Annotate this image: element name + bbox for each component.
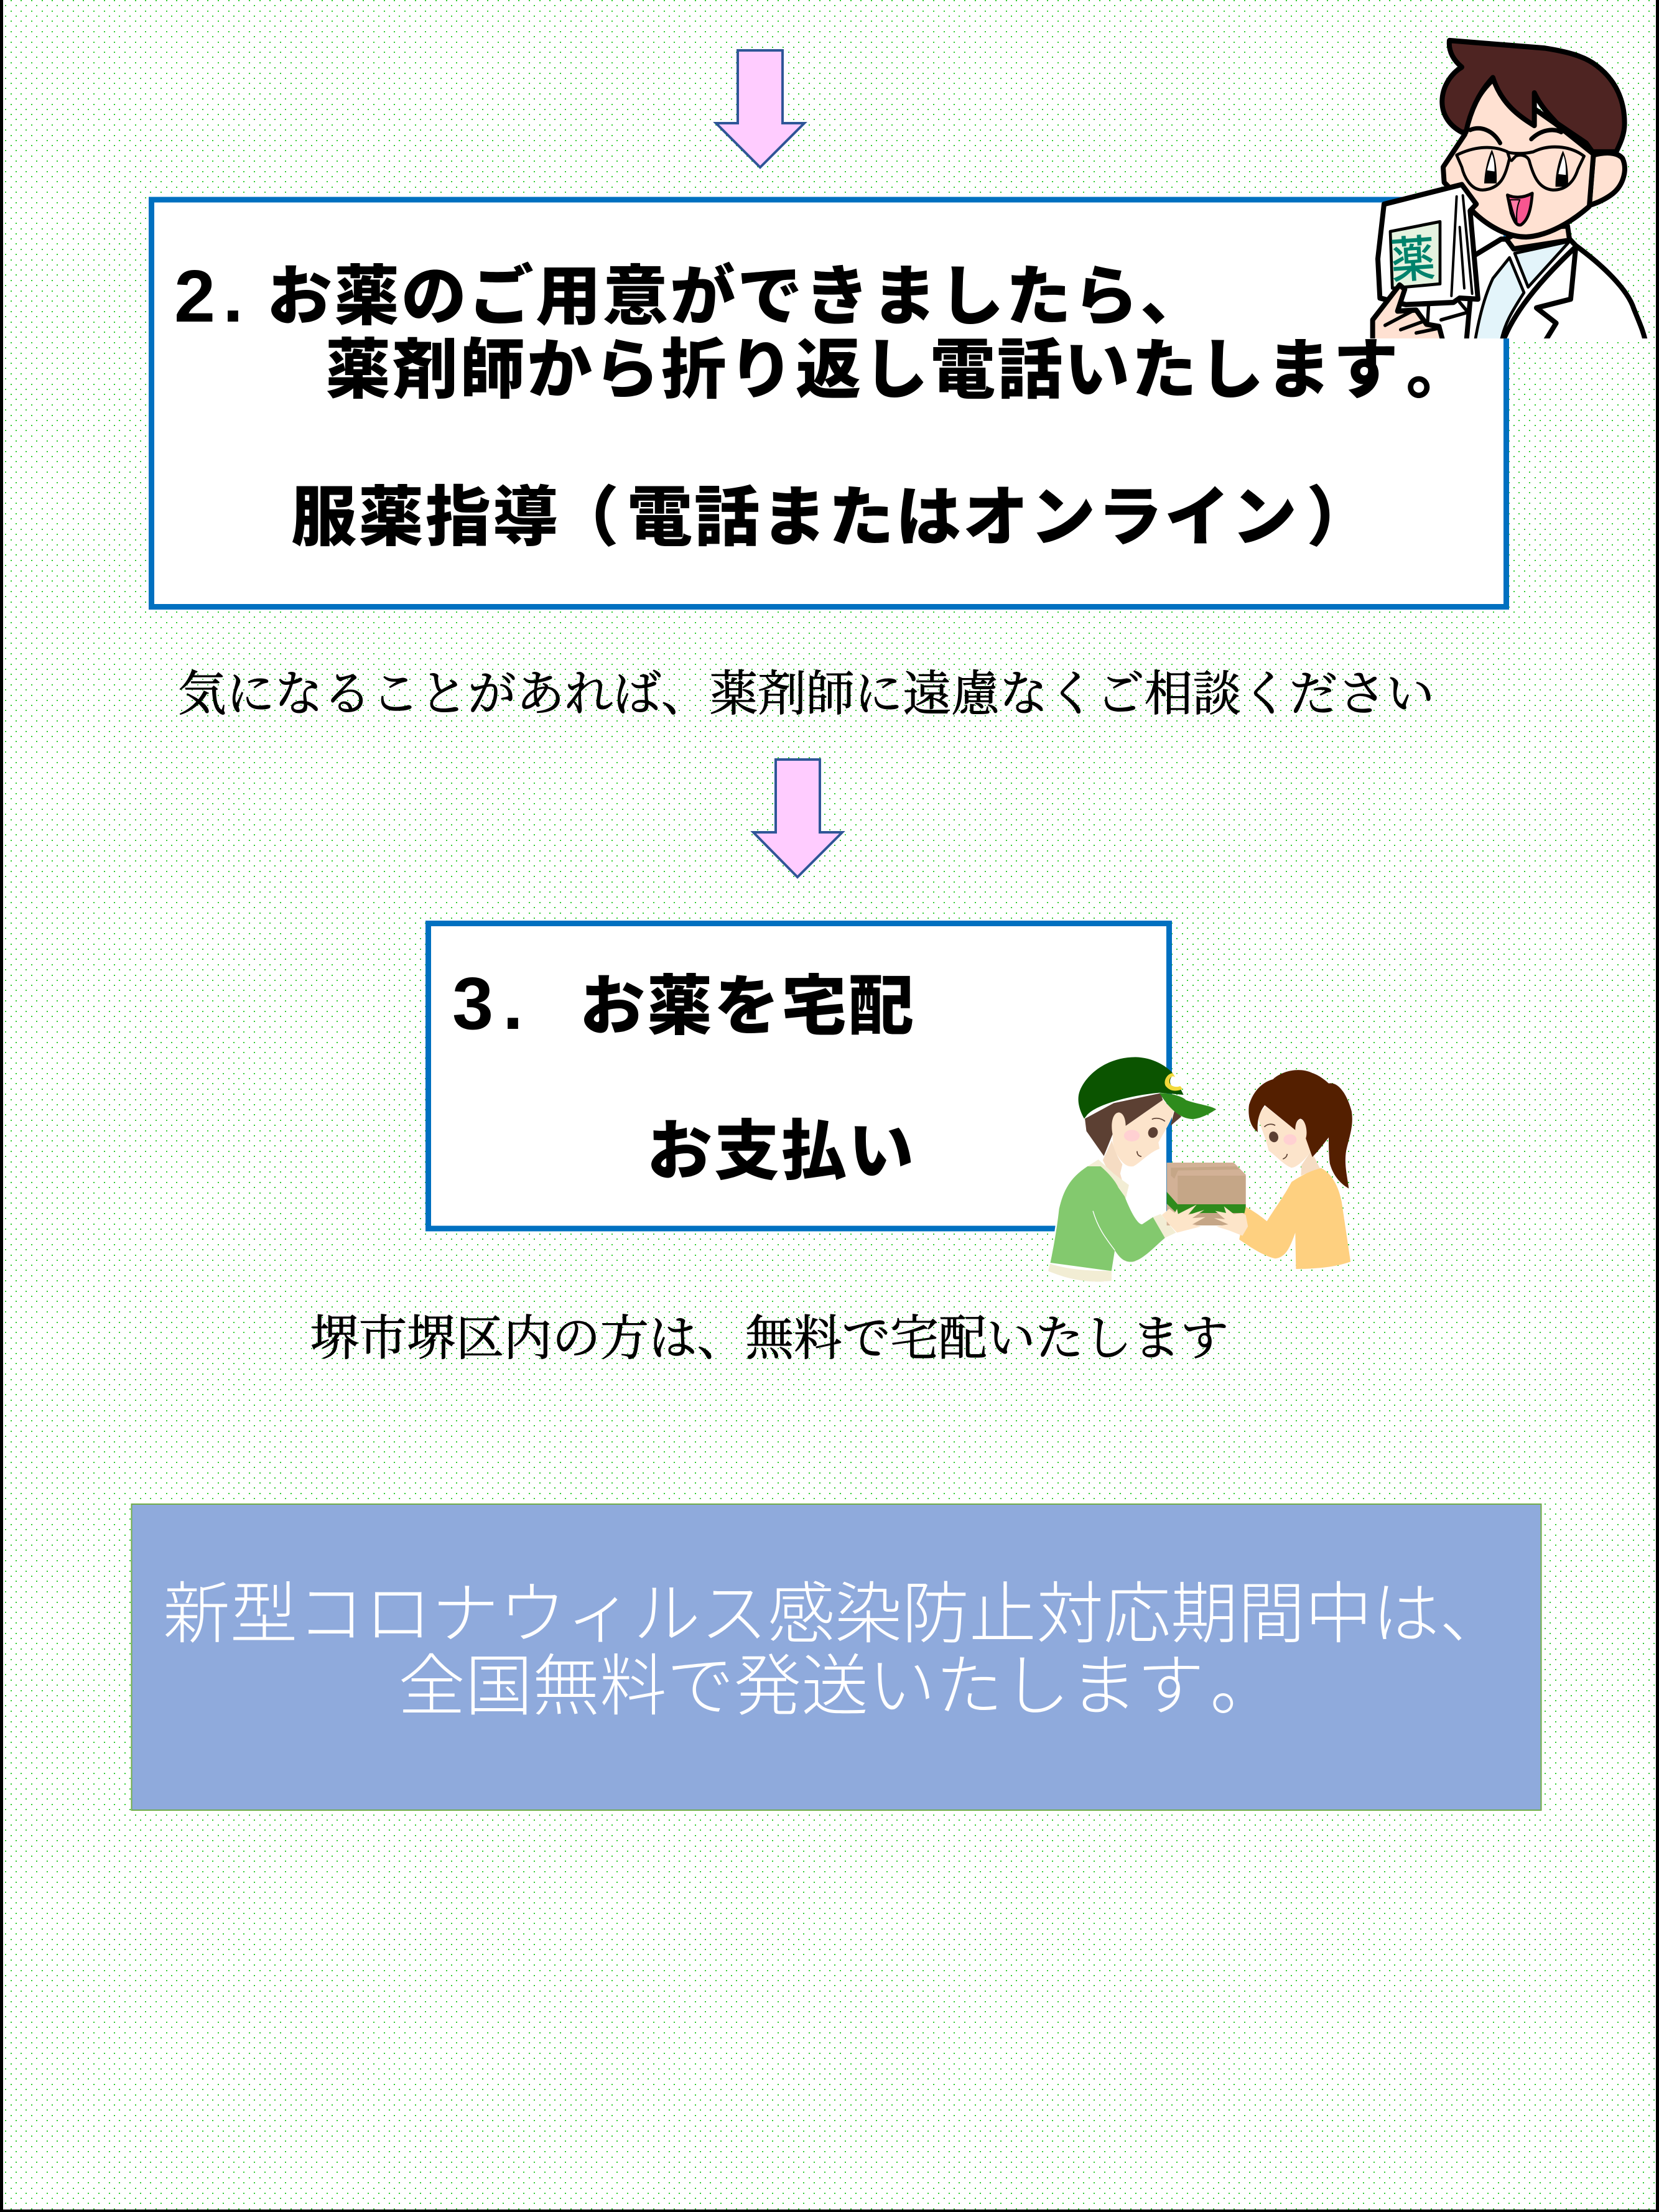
icon label: medicine character: 薬 (1389, 231, 1437, 289)
heading: step 2 third line: 服薬指導（電話またはオンライン） (291, 481, 1373, 554)
panel: step 2 box (152, 200, 1507, 607)
heading: step 2 first line: 2 (174, 255, 217, 338)
arrow: top down arrow (716, 50, 804, 167)
heading: step 2 first line: . (223, 255, 245, 338)
text: notice second line: 全国無料で発送いたします。 (398, 1648, 1277, 1724)
heading: step 3 delivery: 3 (452, 962, 495, 1045)
heading: step 2 first line: お薬のご用意ができましたら、 (267, 261, 1207, 333)
heading: step 2 second line: 薬剤師から折り返し電話いたします。 (325, 334, 1474, 407)
text: consultation note: 気になることがあれば、薬剤師に遠慮なくご相談ください (178, 667, 1434, 721)
heading: step 3 payment: お支払い (647, 1115, 916, 1188)
text: notice first line: 新型コロナウィルス感染防止対応期間中は、 (163, 1576, 1507, 1652)
arrow: middle down arrow (753, 760, 842, 877)
heading: step 3 delivery: お薬を宅配 (580, 970, 916, 1043)
panel: nationwide free shipping notice (132, 1504, 1541, 1810)
icon: courier handing parcel to customer (1048, 1057, 1352, 1283)
heading: step 3 delivery: . (503, 962, 525, 1045)
panel: step 3 box (428, 923, 1169, 1229)
icon: pharmacist holding medicine packet (1373, 40, 1647, 346)
heading: step 3 delivery (452, 962, 916, 1045)
text: Sakai delivery note: 堺市堺区内の方は、無料で宅配いたします (310, 1312, 1229, 1365)
